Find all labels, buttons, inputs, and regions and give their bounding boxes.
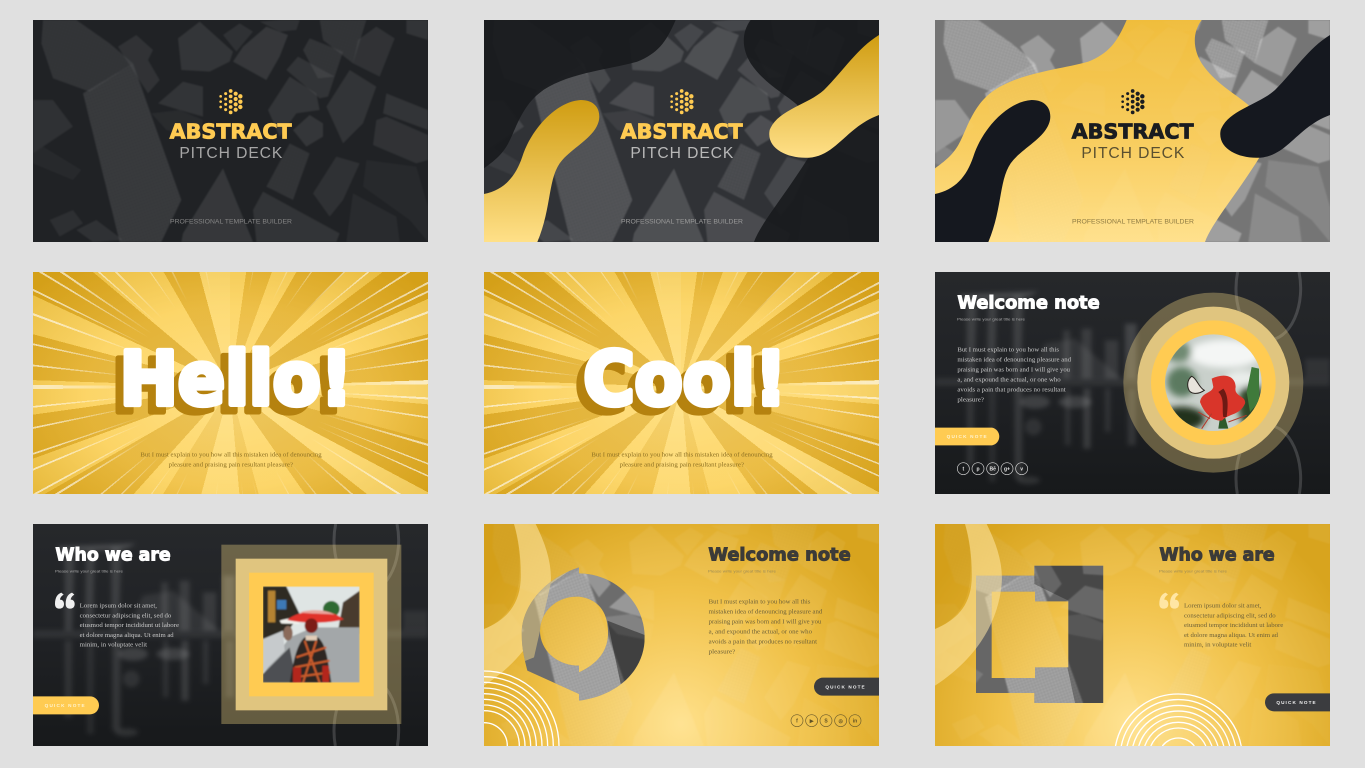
button: quick note: QUICK NOTE [825, 684, 865, 689]
tagline: PROFESSIONAL TEMPLATE BUILDER [621, 218, 743, 225]
body text: mistaken idea of denouncing pleasure and [709, 608, 823, 615]
panel: Hello slide [33, 272, 428, 494]
decorative dark left blob [935, 524, 971, 629]
yellow blob [935, 20, 1260, 242]
button: quick note [935, 428, 999, 445]
caption: pleasure and praising pain resultant pleasure? [620, 461, 744, 468]
body text [1184, 602, 1283, 649]
body text: pleasure? [957, 396, 984, 403]
body text: minim, in voluptate velit [1184, 642, 1251, 649]
social icons [957, 463, 1028, 475]
photo: butterfly on red flower [1165, 334, 1262, 431]
caption: pleasure and praising pain resultant pleasure? [169, 461, 293, 468]
big word: Cool!: Cool! [583, 336, 787, 422]
tagline: PROFESSIONAL TEMPLATE BUILDER [170, 218, 292, 225]
body text [80, 602, 179, 649]
subtitle: Please write your great title is here [55, 570, 123, 574]
body text: et dolore magna aliqua. Ut enim ad [80, 632, 174, 639]
body text: mistaken idea of denouncing pleasure and [957, 356, 1072, 363]
concentric rings [1115, 694, 1241, 746]
body text: a, and expound the actual, or one who [709, 628, 813, 635]
dark blob right [1220, 35, 1330, 158]
social icons: t [962, 467, 964, 473]
subheading: PITCH DECK: PITCH DECK [179, 145, 283, 162]
subheading: PITCH DECK: PITCH DECK [1081, 145, 1185, 162]
body text [957, 346, 1072, 403]
body text: consectetur adipiscing elit, sed do [80, 612, 172, 619]
heading: Welcome note [957, 292, 1100, 313]
background: aerial city photo [33, 20, 428, 242]
social icons: f [796, 719, 798, 725]
background: faint city [484, 524, 879, 746]
icon: quote mark [1159, 593, 1179, 609]
photo stepped frame [976, 566, 1104, 703]
body text: pleasure? [709, 648, 735, 655]
social icons: Bē [989, 467, 996, 473]
heading: ABSTRACT: ABSTRACT [1072, 120, 1194, 144]
body text: praising pain was born and I will give you [957, 366, 1071, 373]
subtitle: Please write your great title is here [957, 318, 1025, 322]
tagline: PROFESSIONAL TEMPLATE BUILDER [1072, 218, 1194, 225]
button: quick note: QUICK NOTE [1276, 700, 1316, 705]
caption: But I must explain to you how all this mistaken idea of denouncing [591, 451, 773, 458]
panel: title slide dark [33, 20, 428, 242]
big word: Cool! shadow: Cool! [575, 344, 779, 430]
photo: woman with red umbrella [263, 586, 360, 683]
decorative dark left blob [484, 524, 520, 629]
icon: hexagon dot logo [1121, 89, 1145, 114]
concentric squares with photo [221, 545, 401, 724]
panel: title slide with gold blobs [484, 20, 879, 242]
button: quick note: QUICK NOTE [947, 434, 987, 439]
gold blob left [484, 100, 599, 242]
body text: Lorem ipsum dolor sit amet, [80, 602, 157, 609]
caption [591, 451, 773, 468]
subtitle: Please write your great title is here [708, 570, 776, 574]
body text: Lorem ipsum dolor sit amet, [1184, 602, 1262, 609]
faint city in blob [935, 20, 1330, 242]
panel: Cool slide [484, 272, 879, 494]
dark blob left [935, 100, 1050, 242]
caption: But I must explain to you how all this mistaken idea of denouncing [140, 451, 322, 458]
button: quick note [814, 678, 879, 696]
heading: ABSTRACT: ABSTRACT [621, 120, 743, 144]
heading: Who we are [1159, 544, 1275, 565]
body text: et dolore magna aliqua. Ut enim ad [1184, 632, 1279, 639]
body text: consectetur adipiscing elit, sed do [1184, 612, 1276, 619]
body text: avoids a pain that produces no resultant [957, 386, 1066, 393]
big word: Hello!: Hello! [120, 336, 352, 422]
caption [140, 451, 322, 468]
panel: Who we are yellow [935, 524, 1330, 746]
button: quick note: QUICK NOTE [45, 703, 85, 708]
icon: quote mark [55, 593, 75, 609]
icon: hexagon dot logo [670, 89, 694, 114]
icon: hexagon dot logo [219, 89, 243, 114]
panel: Welcome note yellow [484, 524, 879, 746]
panel: Who we are dark [33, 524, 428, 746]
big word: Hello! shadow: Hello! [112, 344, 344, 430]
background: faint city [935, 524, 1330, 746]
body text: But I must explain to you how all this [709, 598, 811, 605]
subtitle: Please write your great title is here [1159, 570, 1227, 574]
body text: minim, in voluptate velit [80, 642, 147, 649]
central city photo blob [484, 20, 808, 242]
social icons: S [824, 719, 828, 725]
body text [709, 598, 823, 655]
body text: avoids a pain that produces no resultant [709, 638, 817, 645]
button: quick note [33, 696, 99, 714]
heading: Welcome note [708, 544, 851, 565]
background: aerial city photo [935, 20, 1330, 242]
concentric rings [484, 671, 559, 746]
body text: eiusmod tempor incididunt ut labore [80, 622, 179, 629]
body text: eiusmod tempor incididunt ut labore [1184, 622, 1283, 629]
body text: But I must explain to you how all this [957, 346, 1059, 353]
social icons: v [1020, 467, 1023, 473]
panel: title slide yellow [935, 20, 1330, 242]
photo ring with arrows [522, 568, 645, 700]
decorative light band [935, 524, 1002, 686]
social icons: ▶ [809, 719, 815, 725]
heading: ABSTRACT: ABSTRACT [170, 120, 292, 144]
social icons: p [976, 467, 980, 473]
gold blob right [769, 35, 879, 158]
concentric circles with photo [1123, 293, 1303, 473]
decorative light band [484, 524, 551, 686]
background: night skyline [33, 524, 428, 746]
social icons: ◎ [838, 719, 843, 725]
panel: Welcome note dark [935, 272, 1330, 494]
button: quick note [1265, 693, 1330, 711]
social icons [791, 715, 861, 727]
social icons: g+ [1004, 467, 1010, 473]
social icons: in [853, 719, 857, 725]
heading: Who we are [55, 544, 171, 565]
subheading: PITCH DECK: PITCH DECK [630, 145, 734, 162]
body text: a, and expound the actual, or one who [957, 376, 1061, 383]
background: night skyline [935, 272, 1330, 494]
body text: praising pain was born and I will give you [709, 618, 822, 625]
